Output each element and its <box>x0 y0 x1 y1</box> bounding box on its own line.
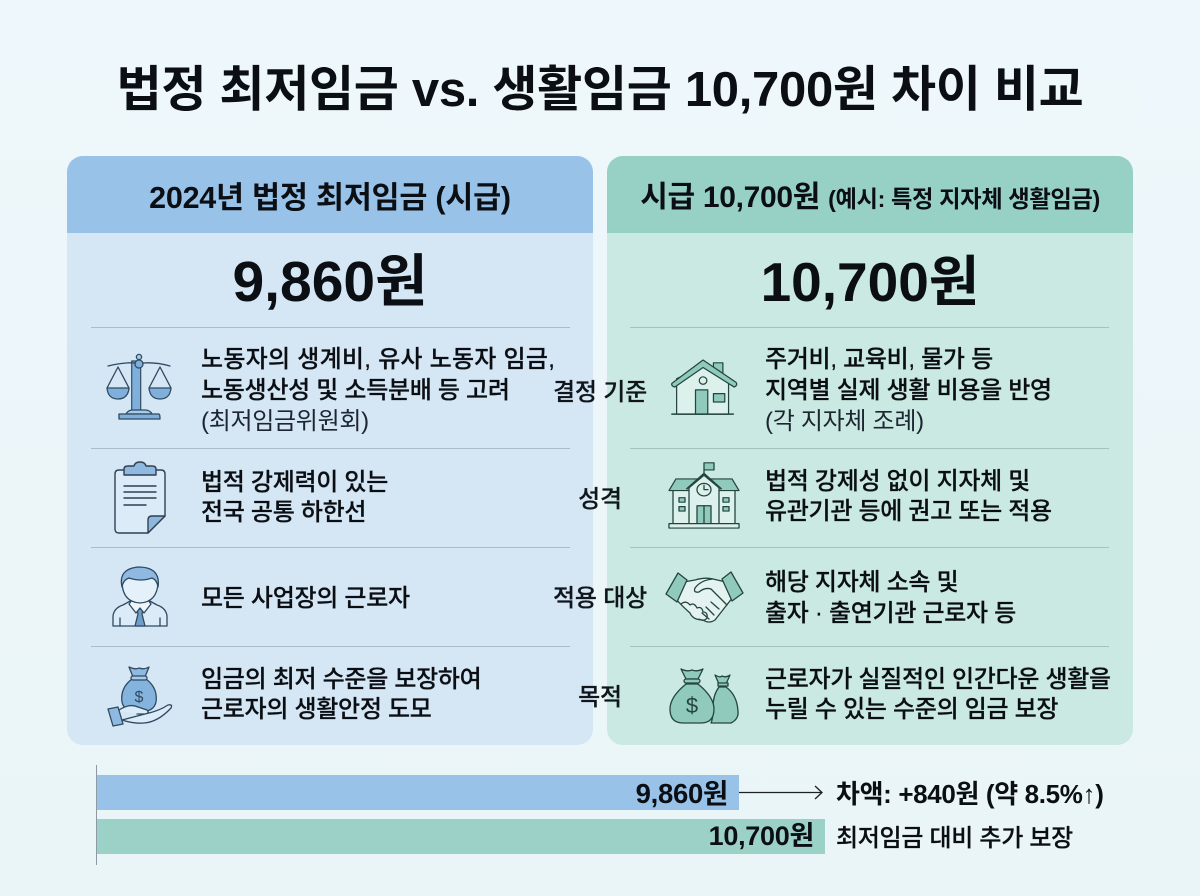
right text: criteria: 주거비, 교육비, 물가 등 <box>765 346 993 373</box>
bar label: 9,860: 9,860원 <box>636 778 728 809</box>
icon: hand holding money bag: $ <box>135 689 144 706</box>
bar chart comparison <box>96 765 1104 865</box>
icon: scales <box>106 354 172 420</box>
right text: nature: 유관기관 등에 권고 또는 적용 <box>765 498 1052 525</box>
bar label: 10,700: 10,700원 <box>709 821 814 851</box>
left panel header <box>67 156 593 233</box>
icon: handshake <box>665 571 744 623</box>
right text: criteria <box>765 346 1052 435</box>
left amount: 9,860원 <box>232 250 428 314</box>
left text: scope: 모든 사업장의 근로자 <box>201 585 410 612</box>
center label: nature: 성격 <box>578 486 622 513</box>
icon: clipboard document <box>114 461 166 534</box>
difference note: 차액: +840원 (약 8.5%↑) <box>836 779 1104 809</box>
right text: nature: 법적 강제성 없이 지자체 및 <box>765 468 1030 495</box>
icon: hand holding money bag <box>107 666 172 727</box>
left text: purpose: 임금의 최저 수준을 보장하여 <box>201 666 481 693</box>
left text: criteria: 노동생산성 및 소득분배 등 고려 <box>201 377 510 404</box>
left text: nature: 법적 강제력이 있는 <box>201 469 388 496</box>
panel: living wage <box>607 156 1133 745</box>
left header text: 2024년 법정 최저임금 (시급) <box>149 181 511 215</box>
center label: scope: 적용 대상 <box>553 585 647 612</box>
left text: purpose: 근로자의 생활안정 도모 <box>201 696 432 723</box>
icon: school building <box>668 462 740 529</box>
bar: minimum wage <box>97 775 739 810</box>
axis line <box>96 765 97 865</box>
icon: house <box>671 359 738 415</box>
right text: scope: 출자 · 출연기관 근로자 등 <box>765 600 1016 627</box>
center label: purpose: 목적 <box>578 684 622 711</box>
icon: worker <box>112 566 168 627</box>
right text: purpose <box>765 666 1111 723</box>
right text: criteria: 지역별 실제 생활 비용을 반영 <box>765 377 1052 404</box>
left text: criteria <box>201 346 555 435</box>
additional guarantee note: 최저임금 대비 추가 보장 <box>836 825 1073 852</box>
left text: criteria: (최저임금위원회) <box>201 408 369 435</box>
bar: living wage <box>97 819 825 854</box>
right text: purpose: 근로자가 실질적인 인간다운 생활을 <box>765 666 1111 693</box>
right text: purpose: 누릴 수 있는 수준의 임금 보장 <box>765 696 1058 723</box>
right panel header <box>607 156 1133 233</box>
arrow <box>739 786 823 800</box>
right amount: 10,700원 <box>761 251 979 313</box>
right text: nature <box>765 468 1052 525</box>
right text: scope: 해당 지자체 소속 및 <box>765 569 958 596</box>
icon: money bags: $ <box>686 693 698 718</box>
center label: criteria: 결정 기준 <box>553 379 647 406</box>
panel: statutory minimum wage <box>67 156 593 745</box>
right header text: 시급 10,700원 (예시: 특정 지자체 생활임금) <box>640 181 1100 214</box>
left text: nature <box>201 469 388 526</box>
right text: criteria: (각 지자체 조례) <box>765 408 924 435</box>
icon: money bags <box>669 668 739 724</box>
left text: criteria: 노동자의 생계비, 유사 노동자 임금, <box>201 346 555 373</box>
title: 법정 최저임금 vs. 생활임금 10,700원 차이 비교 <box>117 63 1083 117</box>
right text: scope <box>765 569 1016 627</box>
left text: nature: 전국 공통 하한선 <box>201 499 366 526</box>
left text: purpose <box>201 666 481 723</box>
